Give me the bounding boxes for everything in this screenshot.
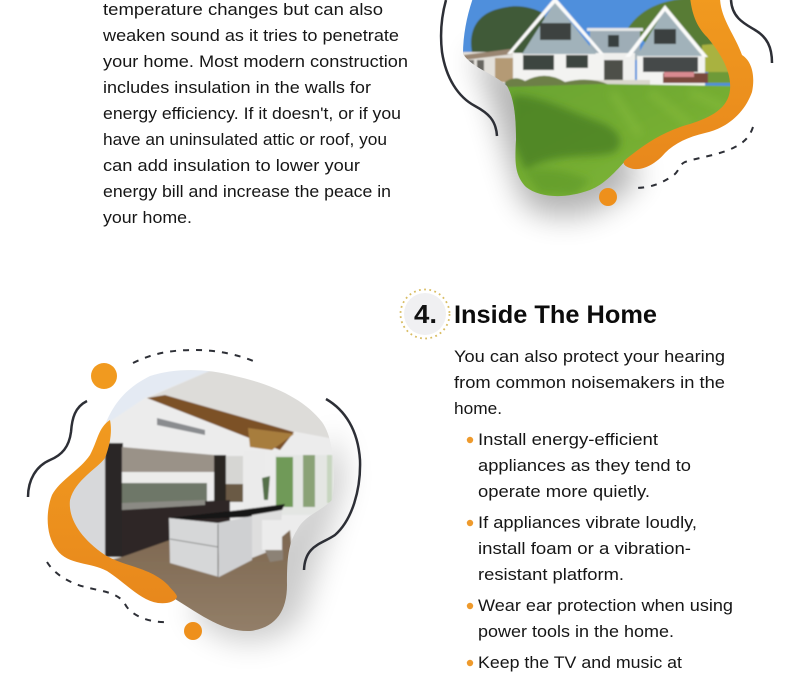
text block: insulation paragraph: your home. bbox=[103, 208, 192, 227]
step badge: number 4: 4. bbox=[414, 299, 437, 329]
bullet: ear protection: Wear ear protection when using bbox=[478, 596, 733, 615]
orange dot: small bbox=[184, 622, 202, 640]
photo: kitchen bbox=[70, 370, 334, 631]
photo: house and lawn bbox=[463, 0, 730, 196]
orange dot: large bbox=[91, 363, 117, 389]
left curve bbox=[28, 401, 87, 497]
step badge: number 4 bbox=[400, 290, 450, 338]
dashed curve: bottom bbox=[47, 562, 168, 622]
text block: insulation paragraph: have an uninsulated attic or roof, you bbox=[103, 130, 387, 149]
text block: insulation paragraph: temperature changes but can also bbox=[103, 0, 383, 19]
dashed curve bbox=[634, 127, 753, 188]
orange blob bbox=[624, 0, 753, 169]
dashed curve: top bbox=[133, 350, 258, 363]
lawn shadows bbox=[512, 93, 622, 196]
bullet: TV and music: Keep the TV and music at bbox=[478, 653, 682, 672]
text block: insulation paragraph: includes insulation in the walls for bbox=[103, 78, 371, 97]
text block: intro: home. bbox=[454, 399, 502, 418]
orange blob bbox=[48, 420, 177, 603]
right curve bbox=[304, 399, 360, 570]
text block: intro: You can also protect your hearing bbox=[454, 347, 725, 366]
bullet: vibration: install foam or a vibration- bbox=[478, 539, 691, 558]
text block: insulation paragraph: your home. Most modern construction bbox=[103, 52, 408, 71]
orange dot bbox=[599, 188, 617, 206]
text block: insulation paragraph: energy bill and increase the peace in bbox=[103, 182, 391, 201]
bullet: vibration bbox=[467, 513, 697, 584]
bullet: vibration: If appliances vibrate loudly, bbox=[478, 513, 697, 532]
bullet list bbox=[467, 430, 733, 672]
left curve bbox=[441, 0, 497, 136]
illustration: house photo in blob bbox=[441, 0, 772, 216]
text block: insulation paragraph: weaken sound as it tries to penetrate bbox=[102, 26, 399, 45]
bullet: appliances: Install energy-efficient bbox=[478, 430, 658, 449]
text block: insulation paragraph: energy efficiency. If it doesn't, or if you bbox=[103, 104, 401, 123]
illustration: kitchen photo in blob bbox=[28, 350, 360, 641]
bullet: appliances: appliances as they tend to bbox=[478, 456, 691, 475]
text block: intro: from common noisemakers in the bbox=[454, 373, 725, 392]
text block: insulation paragraph: can add insulation to lower your bbox=[103, 156, 360, 175]
text block: insulation paragraph bbox=[102, 0, 408, 227]
bullet: appliances bbox=[467, 430, 691, 501]
bullet: ear protection: power tools in the home. bbox=[478, 622, 674, 641]
bullet: ear protection bbox=[467, 596, 733, 641]
heading: Inside The Home: Inside The Home bbox=[454, 301, 657, 329]
text block: intro bbox=[454, 347, 725, 418]
bullet: vibration: resistant platform. bbox=[478, 565, 624, 584]
bullet: appliances: operate more quietly. bbox=[478, 482, 650, 501]
right curve bbox=[731, 0, 772, 63]
